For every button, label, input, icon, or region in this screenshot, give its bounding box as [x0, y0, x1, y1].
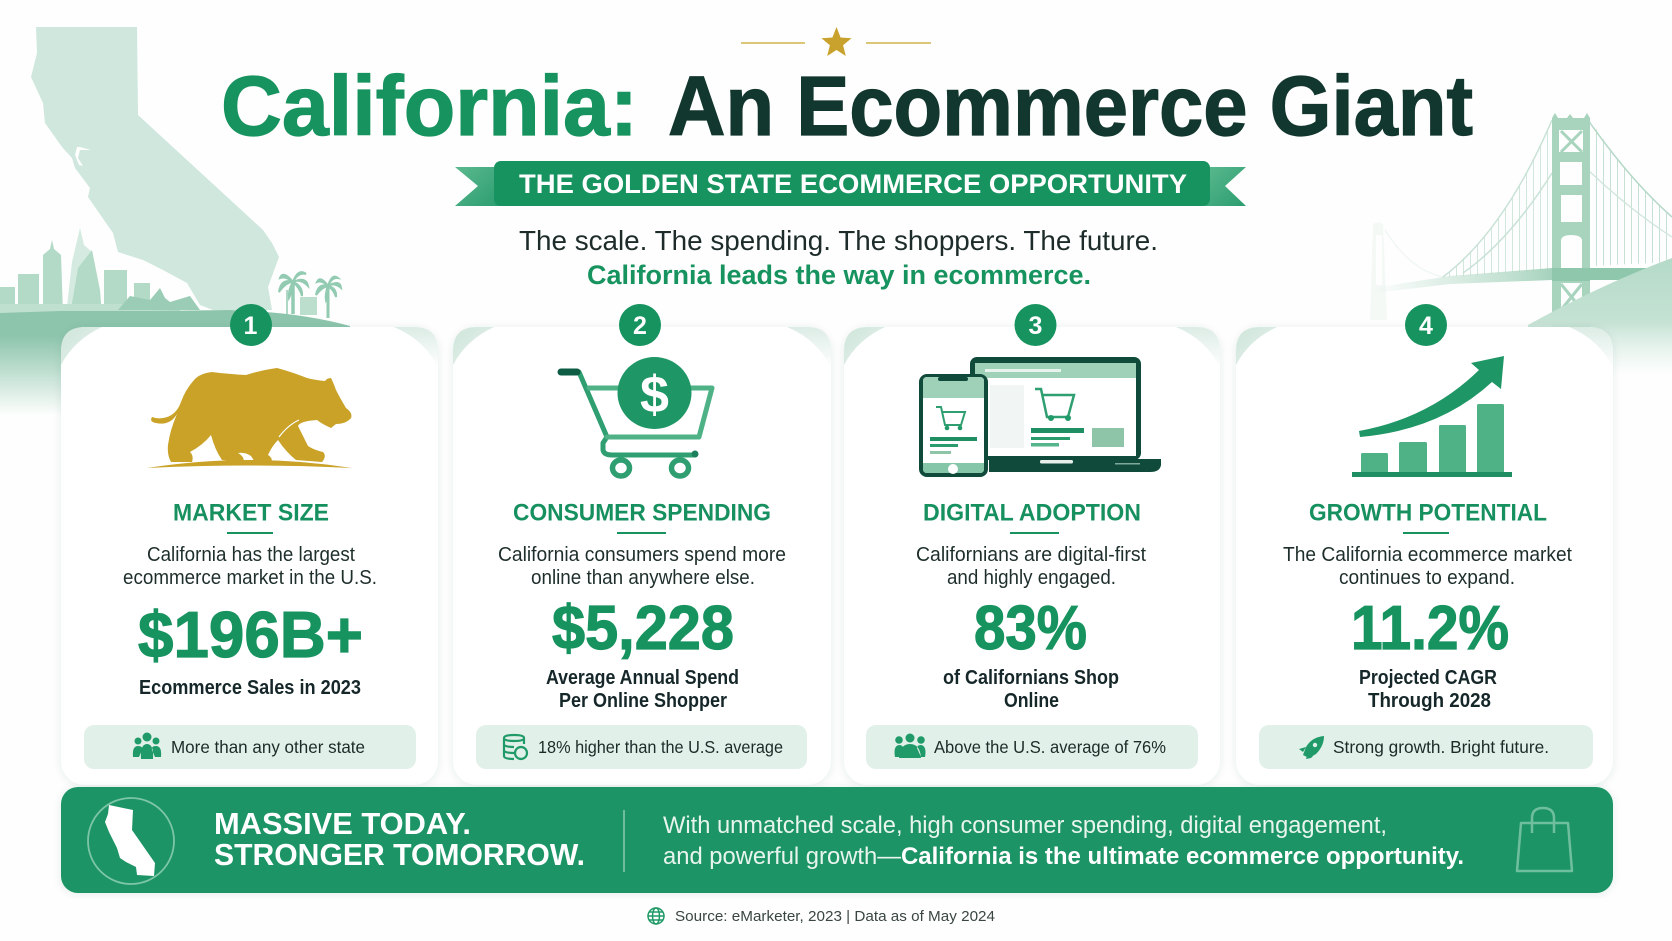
heading: MARKET SIZE [173, 500, 329, 526]
number badge 4: 4 [1419, 312, 1433, 340]
title [221, 59, 1473, 153]
city skyline [0, 228, 317, 316]
underline [227, 532, 273, 534]
palm trees [279, 272, 341, 318]
banner text [663, 812, 1464, 870]
number badge 2: 2 [633, 312, 647, 340]
heading: GROWTH POTENTIAL [1309, 500, 1547, 526]
stat label: Online [1004, 690, 1059, 712]
stat label: Projected CAGR [1359, 667, 1497, 689]
banner headline: STRONGER TOMORROW. [214, 838, 585, 872]
golden gate bridge [1370, 113, 1672, 327]
description: California has the largest [147, 544, 355, 566]
callout text: 18% higher than the U.S. average [538, 737, 783, 757]
callout pill [476, 725, 807, 769]
subtitle: California leads the way in ecommerce. [587, 260, 1091, 290]
stat label: Per Online Shopper [559, 690, 727, 712]
description [916, 544, 1146, 589]
description [1283, 544, 1572, 589]
callout text: Strong growth. Bright future. [1333, 737, 1549, 757]
san francisco bay [75, 147, 91, 166]
icon: globe [648, 908, 664, 924]
number badge 3: 3 [1029, 312, 1042, 340]
statistic: 83% [974, 594, 1087, 663]
ground band [0, 310, 350, 415]
ribbon banner: THE GOLDEN STATE ECOMMERCE OPPORTUNITY [519, 169, 1187, 199]
california map silhouette [31, 27, 279, 310]
icon: growth chart [1352, 356, 1512, 477]
underline [617, 532, 666, 534]
icon: coins [504, 735, 527, 759]
subtitle: The scale. The spending. The shoppers. The future. [519, 225, 1158, 256]
stat label: Average Annual Spend [546, 667, 739, 689]
callout text: More than any other state [171, 737, 365, 757]
number badge 3 [1014, 304, 1056, 346]
panel: market size [61, 304, 438, 785]
subtitle [519, 225, 1158, 290]
banner text: With unmatched scale, high consumer spending, digital engagement, [663, 812, 1387, 839]
icon: shopping cart with coin: $ [640, 366, 669, 424]
icon: golden bear [147, 368, 352, 468]
statistic: $5,228 [552, 594, 734, 663]
icon: shopping bag [1517, 808, 1572, 871]
panel: consumer spending [453, 304, 831, 785]
stat label [1359, 667, 1497, 712]
banner text: and powerful growth— [663, 843, 901, 870]
icon: laptop and phone [919, 357, 1161, 477]
number badge 4 [1405, 304, 1447, 346]
divider [624, 810, 625, 872]
title: An Ecommerce Giant [668, 59, 1473, 153]
callout text: Above the U.S. average of 76% [934, 737, 1166, 757]
title: California: [221, 59, 638, 153]
icon: people [894, 734, 926, 758]
panel: growth potential [1236, 304, 1613, 785]
icon: group [133, 732, 161, 759]
banner headline [214, 807, 585, 872]
source text: Source: eMarketer, 2023 | Data as of May 2024 [675, 908, 995, 925]
description: continues to expand. [1339, 567, 1515, 589]
description: and highly engaged. [947, 567, 1116, 589]
number badge 2 [619, 304, 661, 346]
description: online than anywhere else. [531, 567, 755, 589]
stat label [943, 667, 1119, 712]
statistic: $196B+ [138, 598, 363, 671]
star ornament [741, 27, 931, 56]
panel: digital adoption [844, 304, 1220, 785]
description: The California ecommerce market [1283, 544, 1572, 566]
description: Californians are digital-first [916, 544, 1146, 566]
closing banner [61, 787, 1613, 893]
stat label: Through 2028 [1368, 690, 1491, 712]
callout pill [866, 725, 1198, 769]
description [123, 544, 377, 589]
icon: california in circle [88, 798, 174, 884]
stat label [546, 667, 739, 712]
callout pill [1259, 725, 1593, 769]
callout pill [84, 725, 416, 769]
description: ecommerce market in the U.S. [123, 567, 377, 589]
banner headline: MASSIVE TODAY. [214, 807, 471, 841]
description: California consumers spend more [498, 544, 786, 566]
heading: CONSUMER SPENDING [513, 500, 771, 526]
ribbon banner [455, 161, 1246, 206]
source line [648, 908, 995, 925]
banner text: California is the ultimate ecommerce opportunity. [901, 843, 1464, 870]
stat label: Ecommerce Sales in 2023 [139, 677, 361, 699]
hill behind bridge [1528, 258, 1672, 375]
icon: shopping cart with coin [561, 357, 712, 476]
number badge 1 [230, 304, 272, 346]
description [498, 544, 786, 589]
underline [1010, 532, 1059, 534]
icon: rocket [1299, 736, 1324, 759]
heading: DIGITAL ADOPTION [923, 500, 1141, 526]
number badge 1: 1 [244, 312, 258, 340]
underline [1403, 532, 1449, 534]
statistic: 11.2% [1351, 594, 1509, 663]
stat label: of Californians Shop [943, 667, 1119, 689]
